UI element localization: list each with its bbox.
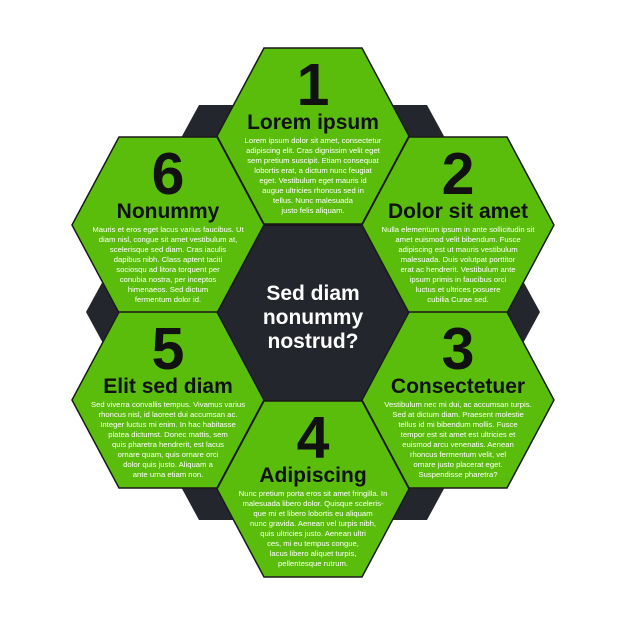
hexagon 2: erat ac hendrerit. Vestibulum ante (401, 265, 515, 274)
hexagon 6: dapibus nibh. Class aptent taciti (114, 255, 223, 264)
hexagon 3: ornare justo placerat eget. (413, 460, 503, 469)
hexagon 5: 5 (152, 316, 184, 382)
hexagon 3: Consectetuer (391, 375, 525, 398)
center hexagon (217, 225, 409, 401)
hexagon 6: fermentum dolor id. (135, 295, 201, 304)
hexagon 4: quis ultricies justo. Aenean ultri (260, 529, 366, 538)
center hexagon: nostrud? (268, 330, 358, 353)
hexagon 4: pellentesque rutrum. (278, 559, 348, 568)
hexagon 2: amet euismod velit bibendum. Fusce (395, 235, 521, 244)
hexagon 5: Integer luctus mi enim. In hac habitasse (100, 420, 236, 429)
hexagon 4: que mi et libero lobortis eu aliquam (253, 509, 373, 518)
hexagon 2: adipiscing est ut mauris vestibulum (398, 245, 518, 254)
hexagon 6: Nonummy (117, 200, 220, 223)
hexagon 3: Vestibulum nec mi dui, ac accumsan turpis. (384, 400, 532, 409)
hexagon 2 (362, 137, 554, 313)
hexagon 5: dolor quis justo. Aliquam a (123, 460, 214, 469)
hexagon 1: eget. Vestibulum eget mauris id (259, 176, 367, 185)
hexagon 4: Nunc pretium porta eros sit amet fringilla. In (239, 489, 387, 498)
hexagon 6: diam nisl, congue sit amet vestibulum at, (99, 235, 237, 244)
hexagon 4 (217, 401, 409, 577)
hexagon 4: malesuada libero dolor. Quisque sceleris- (242, 499, 384, 508)
hexagon 3: tempor est sit amet est ultricies et (401, 430, 516, 439)
hexagon 1: 1 (297, 52, 329, 118)
hexagon 5: Elit sed diam (103, 375, 233, 398)
hexagon 5: ornare quam, quis ornare orci (118, 450, 219, 459)
hexagon 2: cubilia Curae sed. (427, 295, 489, 304)
background dark hexagon (86, 105, 540, 520)
hexagon 3: 3 (442, 316, 474, 382)
hexagon 6: himenaeos. Sed dictum (128, 285, 208, 294)
hexagon 6: 6 (152, 141, 184, 207)
hexagon 5 (72, 312, 264, 488)
center hexagon: Sed diam (266, 282, 360, 305)
hexagon 1: sem pretium suscipit. Etiam consequat (247, 156, 380, 165)
hexagon 2: Dolor sit amet (388, 200, 528, 223)
hexagon 1: justo felis aliquam. (280, 206, 345, 215)
hexagon 4: nunc gravida. Aenean vel turpis nibh, (250, 519, 376, 528)
hexagon 5: platea dictumst. Donec mattis, sem (108, 430, 228, 439)
hexagon 1 (217, 48, 409, 224)
hexagon 6: scelerisque sed diam. Cras iaculis (110, 245, 226, 254)
hexagon 2: luctus et ultrices posuere (415, 285, 501, 294)
hexagon 2: Nulla elementum ipsum in ante sollicitudin sit (382, 225, 535, 234)
hexagon 2: ipsum primis in faucibus orci (410, 275, 507, 284)
hexagon 5: rhoncus nisl, id laoreet dui accumsan ac. (99, 410, 237, 419)
hexagon 1: Lorem ipsum dolor sit amet, consectetur (245, 136, 382, 145)
hexagon 6: conubia nostra, per inceptos (120, 275, 216, 284)
hexagon 3: rhoncus fermentum velit, vel (410, 450, 506, 459)
hexagon 2: 2 (442, 141, 474, 207)
hexagon 6: Mauris et eros eget lacus varius faucibus. Ut (92, 225, 244, 234)
hexagon 3: euismod arcu venenatis. Aenean (402, 440, 514, 449)
hexagon 6: sociosqu ad litora torquent per (116, 265, 220, 274)
hexagon 5: ante urna etiam non. (133, 470, 203, 479)
center hexagon: nonummy (263, 306, 363, 329)
hexagon 3 (362, 312, 554, 488)
hexagon 3: Sed at dictum diam. Praesent molestie (392, 410, 524, 419)
hexagon 1: Lorem ipsum (247, 111, 379, 134)
hexagon 4: ces, mi eu tempus congue, (267, 539, 359, 548)
hexagon 4: 4 (297, 405, 330, 471)
hexagon 4: lacus libero aliquet turpis, (270, 549, 356, 558)
hexagon 4: Adipiscing (259, 464, 367, 487)
hexagon 3: Suspendisse pharetra? (418, 470, 498, 479)
hexagon 1: adipiscing elit. Cras dignissim velit eget (246, 146, 381, 155)
hexagon 1: lobortis erat, a dictum nunc feugiat (254, 166, 373, 175)
hexagon 5: Sed viverra convallis tempus. Vivamus varius (91, 400, 245, 409)
hexagon 3: tellus id mi bibendum mollis. Fusce (398, 420, 518, 429)
hexagon 5: quis pharetra hendrerit, est lacus (112, 440, 224, 449)
hexagon 2: malesuada. Duis volutpat porttitor (401, 255, 516, 264)
hexagon 1: augue ultricies rhoncus sed in (262, 186, 364, 195)
hexagon 6 (72, 137, 264, 313)
hexagon 1: tellus. Nunc malesuada (273, 196, 354, 205)
